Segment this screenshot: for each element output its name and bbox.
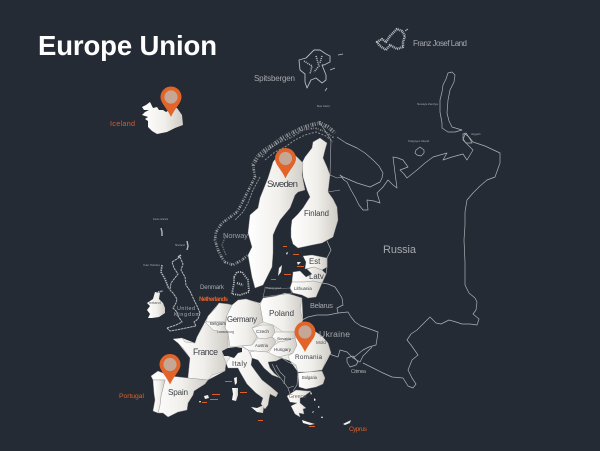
Kolguyev	[415, 147, 424, 156]
dark country labels	[149, 179, 329, 400]
central Europe landmass	[173, 298, 331, 380]
small orange island labels	[202, 246, 315, 427]
grey labels: Shetland	[175, 244, 185, 247]
dark country labels: Poland	[269, 309, 294, 318]
Latvia	[292, 267, 326, 283]
Estonia border with Russia	[322, 241, 331, 283]
Vaygach	[463, 133, 472, 143]
grey labels: Faroe Islands	[153, 218, 169, 221]
Finland	[291, 138, 338, 248]
Belarus border	[302, 283, 343, 320]
grey labels: Belarus	[310, 301, 333, 310]
dark country labels: Belgium	[210, 321, 226, 326]
grey labels: Kolguyev Island	[408, 139, 430, 143]
pin: Sweden	[275, 148, 296, 178]
orange labels: Iceland	[110, 119, 135, 128]
Switzerland gap	[222, 347, 242, 358]
Italy	[226, 347, 278, 409]
Spitsbergen	[299, 29, 408, 91]
grey labels: Russia	[383, 244, 417, 256]
Sweden	[248, 148, 305, 288]
grey labels	[143, 39, 481, 375]
dark country labels: Slovakia	[277, 337, 292, 341]
Spain	[151, 371, 208, 417]
Balkan borders outline	[263, 123, 343, 394]
dark country labels: Luxemburg	[217, 330, 234, 334]
pin: Romania	[294, 322, 316, 352]
Slovenia and Croatia	[250, 351, 282, 378]
grey labels: United	[177, 306, 195, 312]
Poland	[260, 293, 303, 332]
dark country labels: Latv	[309, 272, 324, 281]
orange labels: Netherlands	[199, 296, 229, 303]
dark country labels: Austria	[255, 343, 269, 348]
grey labels: Outer Hebrides	[143, 264, 161, 267]
dark country labels: Czech	[256, 329, 269, 335]
grey labels: Denmark	[200, 284, 225, 291]
dark country labels: Mold	[316, 340, 326, 345]
Russia north coast and borders	[337, 134, 500, 388]
orange labels: Cyprus	[349, 426, 367, 433]
dark country labels: Romania	[295, 354, 322, 361]
Bulgaria	[298, 371, 325, 389]
title: Europe Union	[38, 30, 217, 61]
grey labels: Franz Josef Land	[413, 39, 467, 48]
Czech	[252, 325, 275, 339]
dark country labels: Lithuania	[294, 286, 312, 291]
Ireland	[147, 292, 165, 318]
dark country labels: Kaliningrad	[266, 286, 281, 290]
Sicily	[251, 405, 264, 413]
Balearic islands	[199, 394, 213, 403]
Crimea	[347, 356, 358, 367]
Novaya Zemlya	[440, 72, 462, 132]
Estonia	[303, 255, 327, 270]
Baltic islands	[278, 252, 301, 276]
Norway fjord coast	[215, 123, 335, 265]
grey labels: Crimea	[351, 369, 366, 375]
orange labels	[110, 119, 367, 433]
Austria	[242, 337, 276, 352]
dark country labels: Germany	[227, 315, 257, 324]
Netherlands	[206, 303, 232, 322]
dark country labels: Sweden	[267, 179, 298, 190]
EU countries	[142, 102, 351, 425]
Corsica	[234, 377, 237, 385]
grey labels: Novaya Zemlya	[417, 102, 438, 106]
dark country labels: Hungary	[274, 347, 292, 352]
Greece	[287, 390, 311, 417]
pin: Spain	[160, 354, 180, 384]
dark country labels: Est	[309, 257, 321, 266]
Sardinia	[232, 388, 238, 401]
Cyprus	[343, 420, 351, 425]
Portugal	[153, 380, 165, 413]
dark country labels: Greece	[289, 394, 306, 400]
dark country labels: Ireland	[149, 301, 161, 305]
dark country labels: France	[193, 347, 218, 357]
pin: Iceland	[160, 86, 182, 117]
grey labels: Ukraine	[319, 329, 350, 339]
UK, Denmark and islands outline	[158, 228, 249, 331]
grey labels: Kingdom	[174, 312, 200, 318]
Germany	[225, 299, 263, 347]
Hungary	[268, 338, 297, 357]
France	[173, 322, 228, 380]
Lithuania	[290, 281, 322, 298]
orange labels: Portugal	[119, 393, 144, 400]
grey labels: Norway	[223, 231, 248, 240]
Slovakia	[272, 332, 295, 342]
dark country labels: Spain	[168, 388, 188, 397]
Aegean islands	[310, 392, 323, 418]
Ukraine border	[328, 312, 378, 358]
Franz Josef Land	[377, 29, 405, 50]
outline map: non-EU countries	[302, 72, 500, 388]
Belgium	[205, 322, 228, 333]
grey labels: Vaygach	[471, 133, 481, 136]
grey labels: Spitsbergen	[254, 74, 295, 83]
Romania	[288, 330, 331, 372]
grey labels: Bear Island	[317, 105, 330, 108]
dark country labels: Bulgaria	[302, 375, 318, 380]
Iceland	[142, 102, 183, 134]
dark country labels: Finland	[304, 209, 329, 218]
Crete	[302, 420, 315, 425]
dark country labels: Italy	[232, 359, 247, 368]
